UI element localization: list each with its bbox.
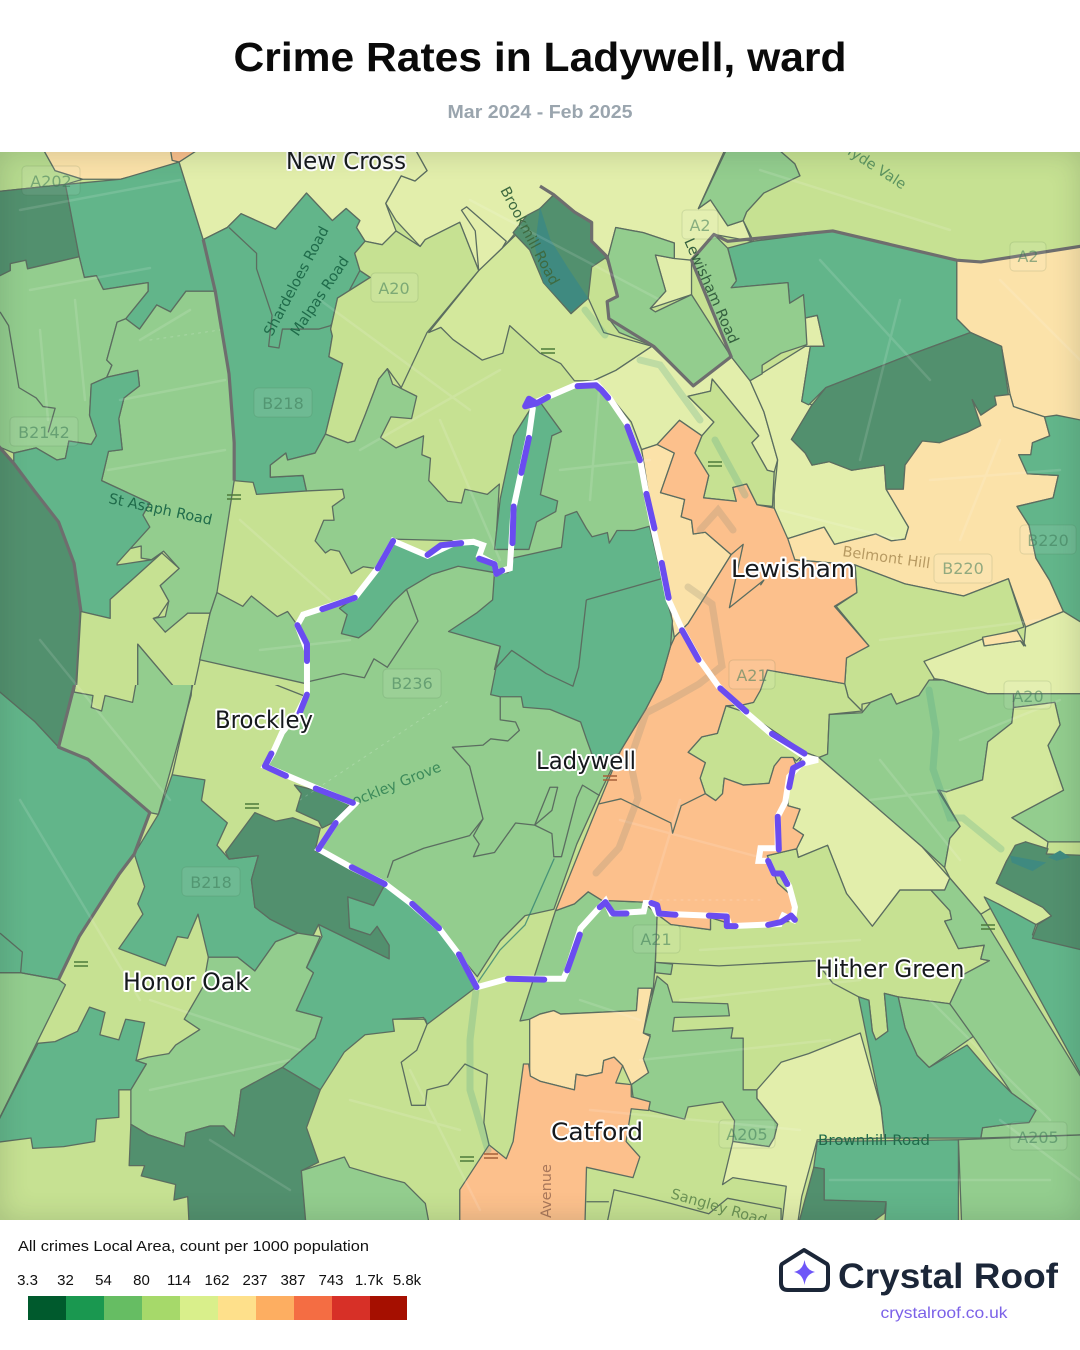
choropleth: north-east areas	[386, 140, 1080, 639]
road number shields: A202	[30, 172, 72, 191]
road number shields: A21	[736, 666, 768, 685]
Ladywell ward boundary, dashed purple on white	[265, 383, 818, 987]
legend values: 1.7k	[355, 1272, 384, 1289]
road names: Malpas Road	[288, 254, 353, 339]
road number shields: A20	[1012, 687, 1044, 706]
place names: New Cross	[286, 147, 406, 175]
place names: Hither Green	[816, 955, 964, 983]
road number shields: B218	[262, 394, 304, 413]
legend values: 743	[318, 1272, 344, 1289]
title	[234, 34, 846, 122]
road number shields: B218	[190, 873, 232, 892]
road number shields: B220	[942, 559, 984, 578]
road number shields: B220	[1027, 531, 1069, 550]
legend values: 32	[57, 1272, 74, 1289]
road names: Brookmill Road	[496, 184, 562, 288]
brand url: crystalroof.co.uk	[880, 1305, 1009, 1322]
road number shields: A205	[1017, 1128, 1059, 1147]
road names: Shardeloes Road	[261, 224, 333, 339]
place names: Lewisham	[731, 555, 855, 583]
road number shields	[10, 166, 1076, 1150]
map roads and waterways	[20, 170, 1080, 1210]
road names: Avenue	[539, 1164, 555, 1218]
road number shields: A21	[640, 930, 672, 949]
map edge vignette	[0, 152, 1080, 1220]
station markers	[74, 349, 995, 1161]
map panel	[0, 152, 1080, 1220]
legend title: All crimes Local Area, count per 1000 population	[18, 1238, 369, 1255]
road names: Brownhill Road	[818, 1133, 930, 1149]
road number shields: A2	[689, 216, 711, 235]
place names: Catford	[551, 1118, 643, 1146]
road names: Belmont Hill	[841, 544, 931, 572]
legend values: 114	[167, 1272, 191, 1289]
legend values: 80	[133, 1272, 150, 1289]
road number shields: B236	[391, 674, 433, 693]
legend values: 237	[242, 1272, 268, 1289]
title: Mar 2024 - Feb 2025	[448, 102, 632, 122]
place names: Ladywell	[536, 747, 636, 775]
legend values: 3.3	[17, 1272, 38, 1289]
legend values	[17, 1272, 422, 1289]
place names: Honor Oak	[123, 968, 249, 996]
road names: St Asaph Road	[107, 491, 213, 529]
road number shields: A20	[378, 279, 410, 298]
footer panel	[0, 1220, 1080, 1350]
road number shields: A205	[726, 1125, 768, 1144]
road number shields: A2	[1017, 247, 1039, 266]
road names: Brockley Grove	[336, 760, 444, 816]
legend colour scale	[28, 1296, 407, 1320]
road names	[107, 140, 931, 1229]
place names: Brockley	[215, 706, 313, 734]
title: Crime Rates in Ladywell, ward	[234, 34, 846, 80]
road number shields: B2142	[18, 423, 70, 442]
road names: Lewisham Road	[680, 236, 741, 346]
legend values: 54	[95, 1272, 112, 1289]
choropleth: Ladywell ward interior areas	[265, 383, 674, 977]
place names	[123, 147, 964, 1146]
road names: Hyde Vale	[839, 140, 909, 193]
icon: Crystal Roof house logo	[781, 1250, 828, 1290]
brand name: Crystal Roof	[838, 1257, 1058, 1296]
choropleth: south-east areas	[460, 420, 1080, 1231]
choropleth: south-west areas	[0, 673, 489, 1231]
legend values: 387	[280, 1272, 306, 1289]
choropleth: north-west areas	[0, 140, 511, 701]
legend values: 5.8k	[393, 1272, 422, 1289]
legend values: 162	[204, 1272, 230, 1289]
